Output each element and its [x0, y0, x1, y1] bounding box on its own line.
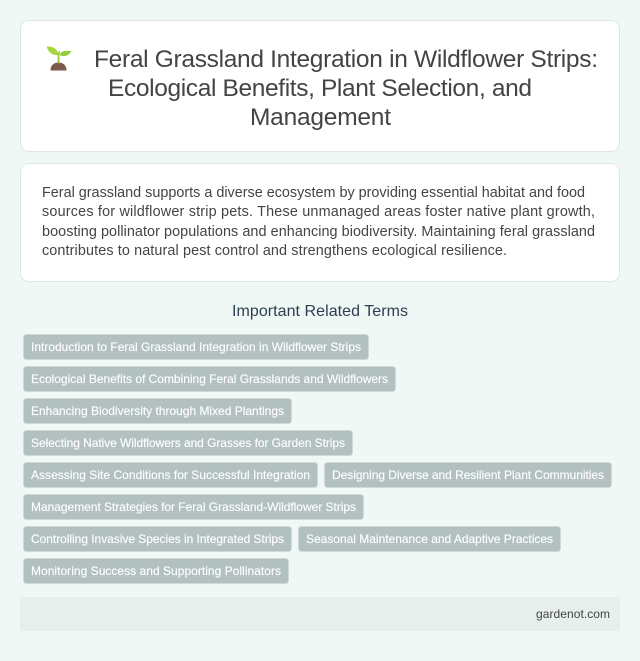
panel: title card: [20, 20, 620, 152]
tag: [24, 558, 288, 584]
tag: [324, 462, 612, 488]
summary text: contributes to natural pest control and strengthens ecological resilience.: [42, 243, 507, 259]
tag: [24, 494, 364, 520]
icon: seedling: [47, 46, 71, 70]
title: [94, 46, 598, 131]
tag: Ecological Benefits of Combining Feral Grasslands and Wildflowers: [31, 372, 388, 386]
tag: Enhancing Biodiversity through Mixed Plantings: [31, 404, 284, 418]
tag: [298, 526, 560, 552]
title: Management: [250, 104, 391, 131]
summary text: sources for wildflower strip pets. These unmanaged areas foster native plant growth,: [42, 204, 595, 220]
summary text: [42, 185, 595, 259]
tag: Management Strategies for Feral Grassland-Wildflower Strips: [31, 500, 356, 514]
tag: Assessing Site Conditions for Successful Integration: [31, 468, 310, 482]
summary text: Feral grassland supports a diverse ecosystem by providing essential habitat and food: [42, 185, 585, 201]
heading: important related terms: Important Related Terms: [232, 303, 408, 320]
title: Feral Grassland Integration in Wildflower Strips:: [94, 46, 598, 73]
tag: Controlling Invasive Species in Integrated Strips: [31, 532, 284, 546]
tag: Seasonal Maintenance and Adaptive Practices: [306, 532, 553, 546]
tag: Designing Diverse and Resilient Plant Communities: [332, 468, 604, 482]
footer source: gardenot.com: [536, 607, 610, 621]
title: Ecological Benefits, Plant Selection, and: [108, 75, 532, 102]
tag: [24, 462, 318, 488]
tag list: [24, 334, 612, 584]
tag: [24, 366, 396, 392]
panel: summary paragraph: [20, 164, 620, 282]
tag: [24, 526, 292, 552]
footer bar: [20, 597, 620, 631]
tag: [24, 398, 292, 424]
tag: [24, 334, 368, 360]
tag: Selecting Native Wildflowers and Grasses for Garden Strips: [31, 436, 345, 450]
tag: Introduction to Feral Grassland Integration in Wildflower Strips: [31, 340, 361, 354]
tag: Monitoring Success and Supporting Pollinators: [31, 564, 281, 578]
summary text: boosting pollinator populations and enhancing biodiversity. Maintaining feral grassland: [42, 224, 595, 240]
tag: [24, 430, 352, 456]
